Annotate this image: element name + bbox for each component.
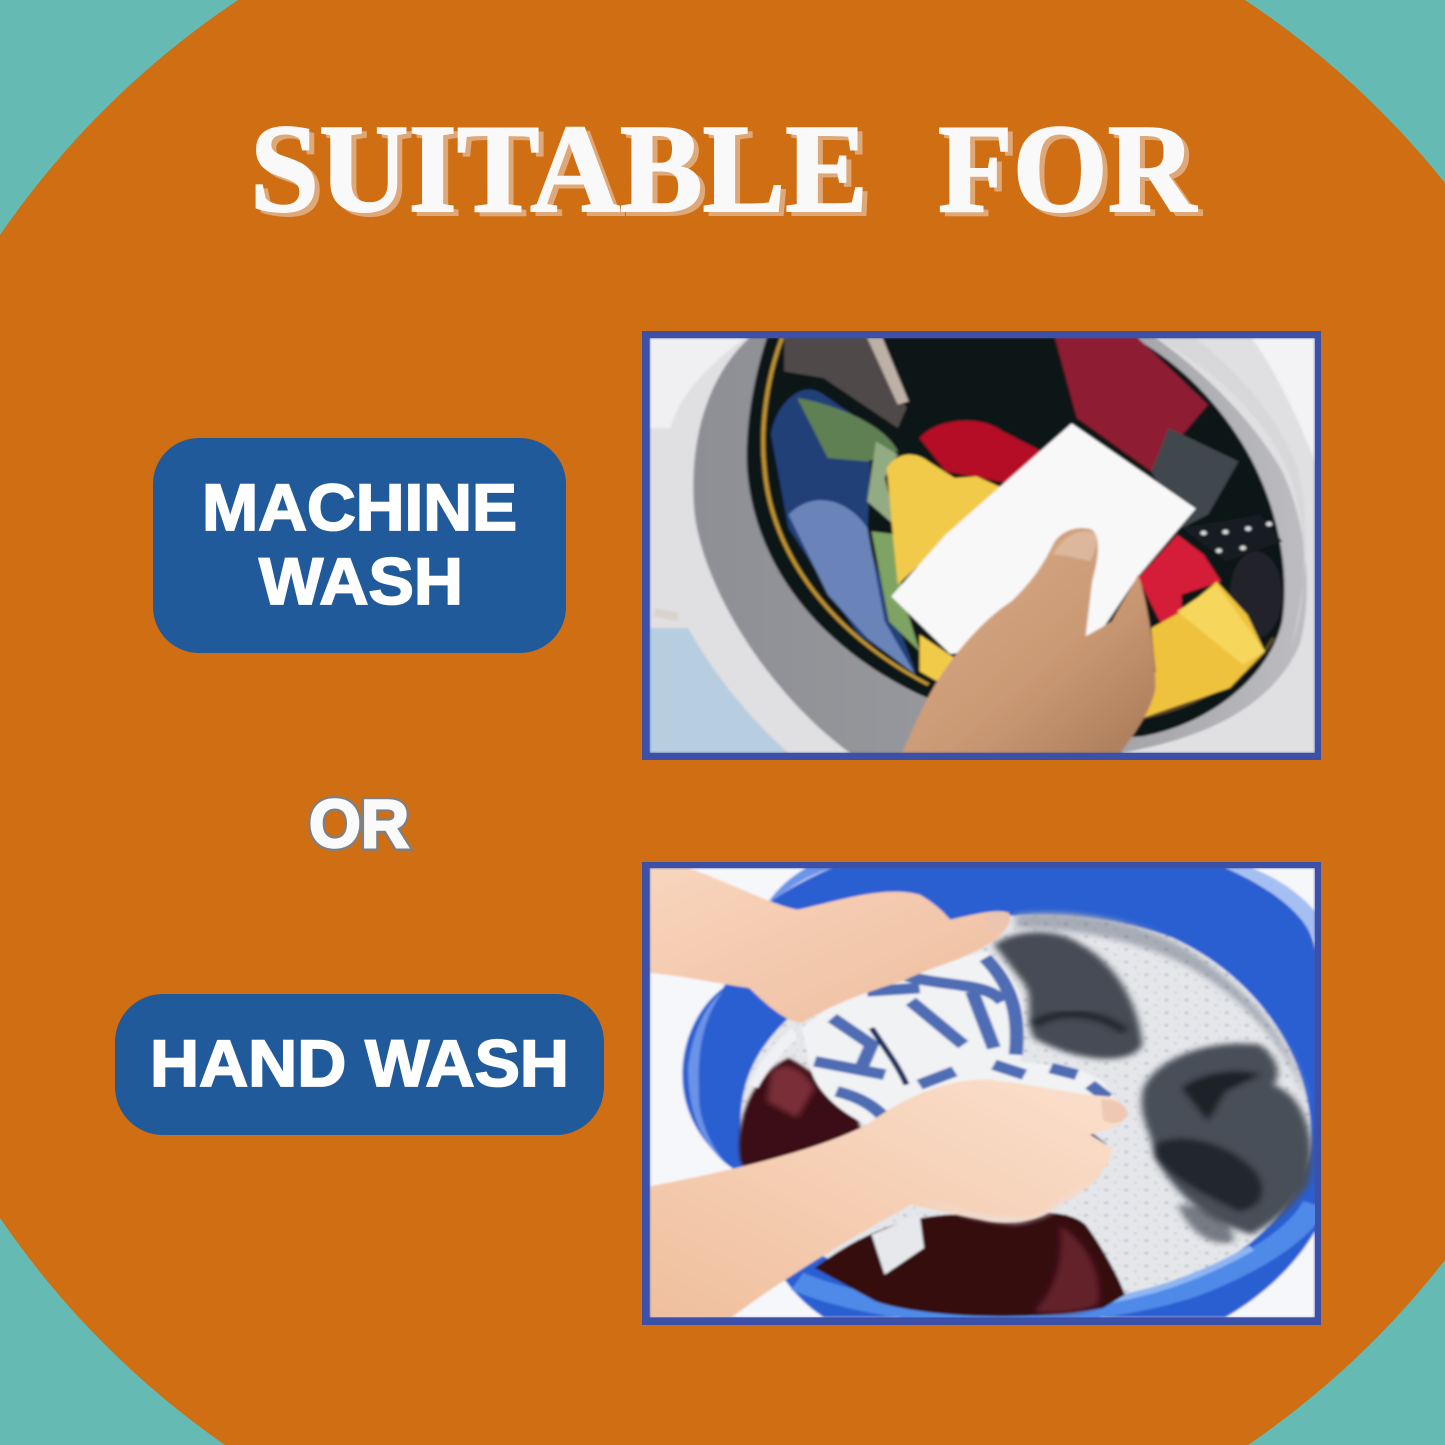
- photo: hand wash: [642, 862, 1321, 1325]
- bucket rim highlight: [797, 1205, 1315, 1315]
- title: SUITABLE: [250, 100, 868, 239]
- label: or: OR: [309, 786, 409, 862]
- foam water: [740, 915, 1311, 1309]
- bucket: [682, 868, 1315, 1317]
- label: machine wash: [153, 438, 566, 653]
- lower arm and hand: [650, 1080, 1126, 1317]
- label: machine wash: MACHINE: [202, 470, 517, 544]
- title: FOR: [943, 104, 1203, 243]
- blue and green clothes: [771, 390, 915, 671]
- striped cloth: [802, 951, 1114, 1125]
- upper arm and hand: [650, 868, 1010, 1023]
- yellow clothes: [887, 455, 1003, 585]
- title: [250, 100, 1203, 243]
- title: FOR: [938, 100, 1198, 239]
- label: or: OR: [309, 786, 409, 862]
- red clothes: [920, 421, 1042, 485]
- hand: [902, 528, 1156, 753]
- title: SUITABLE: [255, 104, 873, 243]
- drum interior and dark clothes: [784, 338, 907, 428]
- drum window: [747, 338, 1284, 737]
- label: machine wash: WASH: [259, 544, 463, 618]
- white sheet: [891, 423, 1196, 654]
- maroon clothes: [739, 1058, 867, 1168]
- door gasket: [693, 338, 1307, 753]
- foam patches: [872, 1215, 924, 1275]
- grey clothes: [994, 932, 1142, 1059]
- label: hand wash: [115, 994, 604, 1135]
- photo: machine wash: [642, 331, 1321, 760]
- label: hand wash: HAND WASH: [150, 1026, 569, 1100]
- perforated drum holes: [1201, 522, 1272, 553]
